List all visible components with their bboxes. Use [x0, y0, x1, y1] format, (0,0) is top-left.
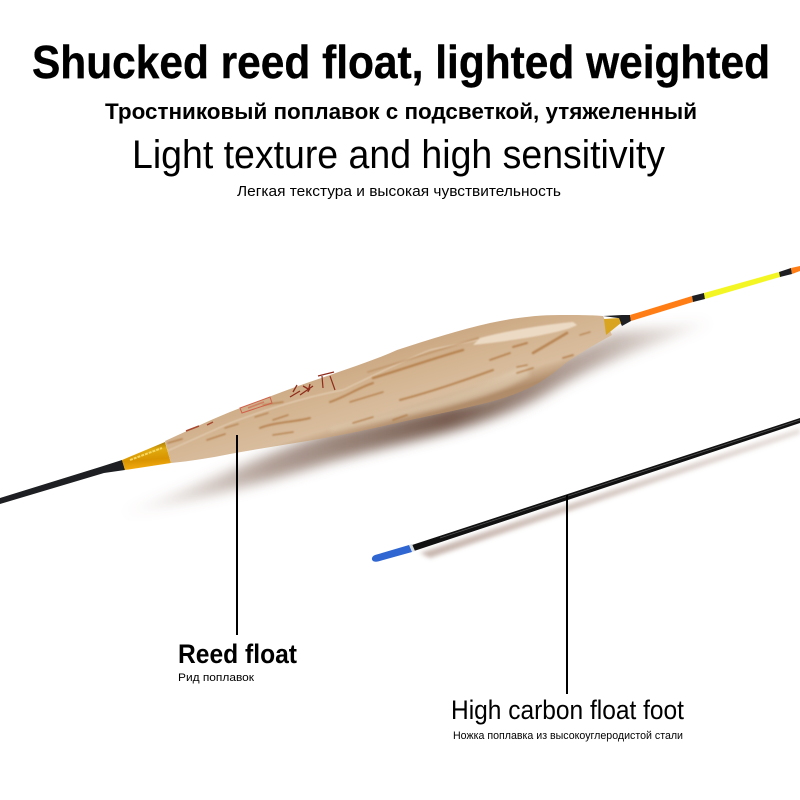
- lower gold collar: [122, 442, 171, 470]
- russian subtitle: Тростниковый поплавок с подсветкой, утяжеленный: [105, 99, 697, 124]
- orange antenna section: [630, 296, 693, 321]
- russian tagline: Легкая текстура и высокая чувствительность: [237, 183, 561, 200]
- label: float foot russian: Ножка поплавка из высокоуглеродистой стали: [453, 730, 683, 742]
- black neck: [603, 315, 631, 326]
- leader line: float foot: [566, 495, 568, 694]
- red stamp and characters: [186, 372, 335, 431]
- label: reed float: Reed float: [178, 639, 297, 669]
- lower pale band: [330, 364, 530, 432]
- wooden body: [165, 315, 612, 463]
- gloss highlight: [473, 322, 577, 345]
- wood grain: [168, 332, 590, 443]
- yellow antenna section: [704, 272, 780, 299]
- reed float illustration: [0, 266, 800, 514]
- black band upper: [779, 268, 792, 277]
- blue tip: [372, 545, 412, 562]
- label: reed float russian: Рид поплавок: [178, 672, 254, 684]
- black rod: [412, 418, 800, 551]
- label: high carbon float foot: High carbon float foot: [451, 695, 684, 725]
- bottom stem: [0, 460, 125, 504]
- wood texture: [165, 322, 590, 452]
- black band: [692, 293, 705, 302]
- float shadow: [118, 322, 712, 514]
- rod sheen: [440, 420, 800, 538]
- float foot illustration: [372, 418, 800, 562]
- leader line: reed float: [236, 435, 238, 635]
- upper gold collar: [604, 318, 621, 335]
- tagline: Light texture and high sensitivity: [132, 133, 665, 177]
- pale centre line: [165, 340, 478, 452]
- silver band: [409, 544, 415, 552]
- gold highlight: [130, 448, 162, 460]
- foot shadow: [420, 428, 800, 558]
- orange tip: [791, 266, 800, 274]
